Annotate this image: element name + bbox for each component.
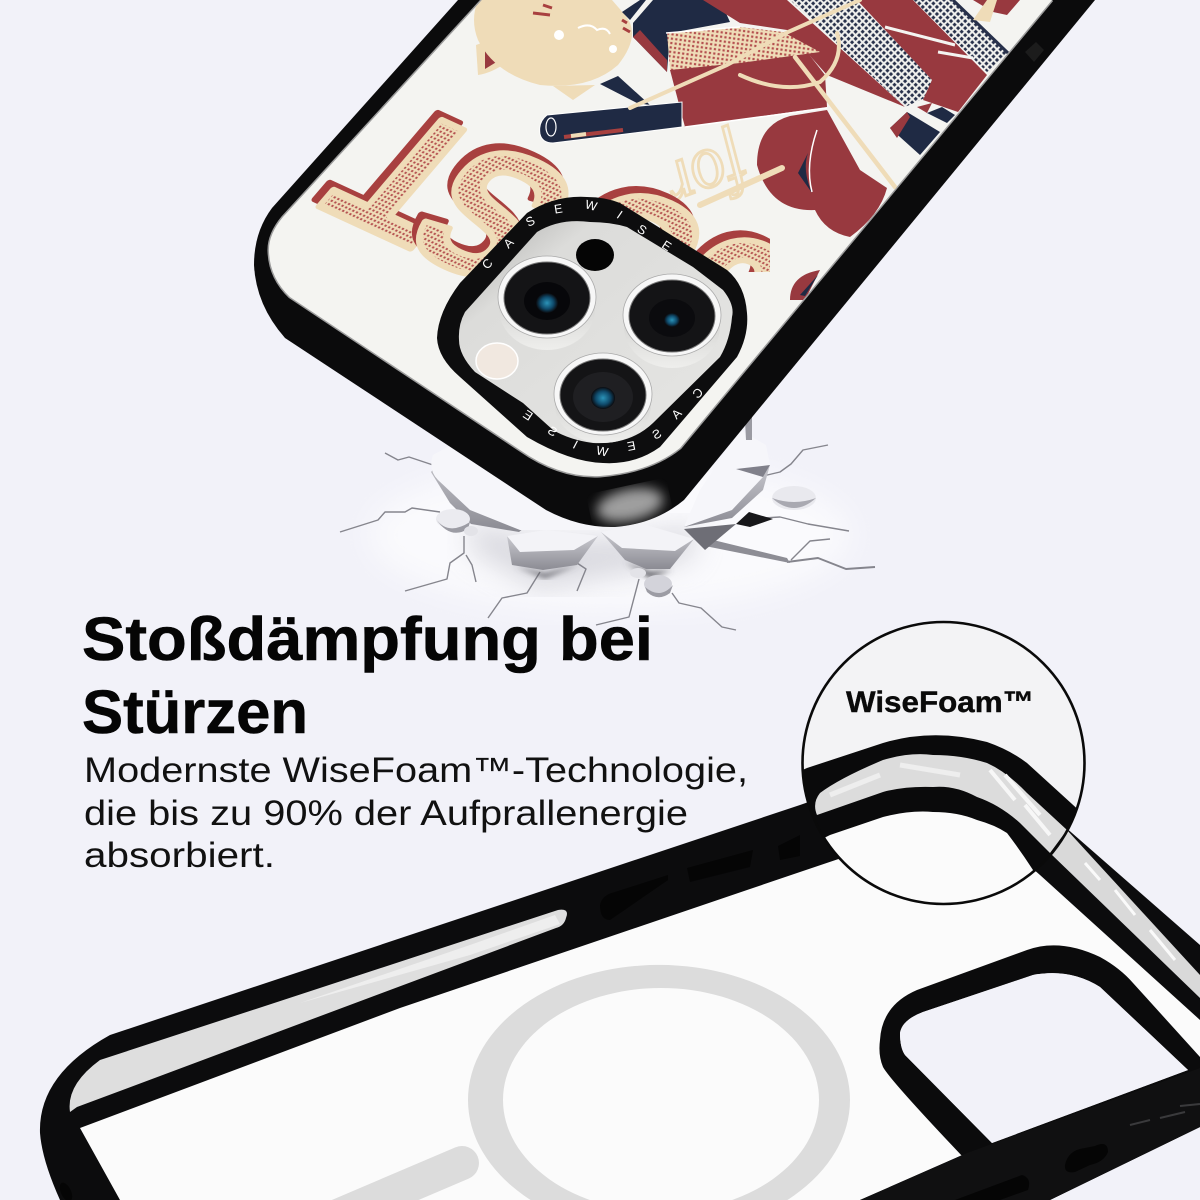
artwork: halftone letters JUST: U [493, 139, 748, 357]
rock chunk: centre-right [601, 532, 694, 569]
plate: left [431, 450, 560, 532]
clear back interior [80, 840, 1200, 1200]
magsafe ring [468, 965, 850, 1200]
artwork: halftone letters JUST: J [603, 193, 832, 399]
foam strip: right side [1050, 830, 1200, 998]
artwork: halftone letters JUST: U [497, 146, 752, 364]
headline: Stürzen [82, 678, 308, 746]
plate: right [684, 465, 770, 527]
chunk shadows [515, 562, 672, 578]
artwork: cream sticks [630, 0, 895, 187]
lens 3 [554, 353, 652, 443]
phone case: bottom, inside view [40, 770, 1200, 1200]
foam strip: left side [70, 910, 567, 1112]
artwork: halftone letters JUST [312, 110, 770, 276]
zoomed foam [815, 754, 1067, 853]
camera cutout [879, 945, 1200, 1157]
headline [82, 605, 653, 746]
artwork: red shapes [666, 0, 1020, 300]
body text [84, 751, 748, 875]
rock chunk: centre-left [507, 536, 598, 570]
magnifier callout [801, 620, 1086, 906]
body text: absorbiert. [84, 836, 275, 875]
pebbles [436, 486, 816, 597]
callout label: WiseFoam™ [846, 686, 1034, 719]
artwork: halftone letters JUST: S [364, 100, 611, 314]
camera island [437, 196, 748, 464]
artwork: script word: for [652, 125, 763, 232]
lens 1 [498, 256, 596, 350]
highlight on case corner [593, 42, 1044, 528]
artwork: halftone letters JUST: S [368, 107, 615, 321]
cracks [340, 445, 875, 630]
phone case: top, dropped on corner [254, 0, 1095, 527]
artwork: halftone letters JUST: J [599, 186, 828, 392]
zoomed frame edge [804, 735, 1076, 870]
back panel artwork [268, 0, 1052, 476]
case frame [40, 770, 1200, 1200]
artwork: cat [474, 0, 632, 100]
body text: die bis zu 90% der Aufprallenergie [84, 794, 688, 833]
left edge hole [57, 1181, 75, 1200]
bottom frame band [860, 1068, 1200, 1200]
artwork: halftone letters JUST: T [290, 71, 528, 281]
artwork: halftone letters JUST: T [286, 64, 524, 274]
brand text on ring [487, 210, 690, 270]
lens 2 [623, 274, 721, 368]
illustration: cracked ground impact [340, 412, 875, 630]
camera island: CASEWISE [482, 200, 672, 268]
artwork: tube [540, 102, 682, 143]
microphone and flash [576, 239, 614, 271]
body text: Modernste WiseFoam™-Technologie, [84, 751, 748, 790]
bottom side port and button [1065, 1144, 1108, 1172]
zoomed interior [825, 812, 1033, 903]
brand text on ring, mirrored: CASEWISE [522, 388, 702, 456]
artwork: navy figure and tube [600, 0, 730, 105]
headline: Stoßdämpfung bei [82, 605, 653, 673]
side buttons [600, 835, 800, 920]
magsafe alignment pill [340, 1163, 462, 1200]
